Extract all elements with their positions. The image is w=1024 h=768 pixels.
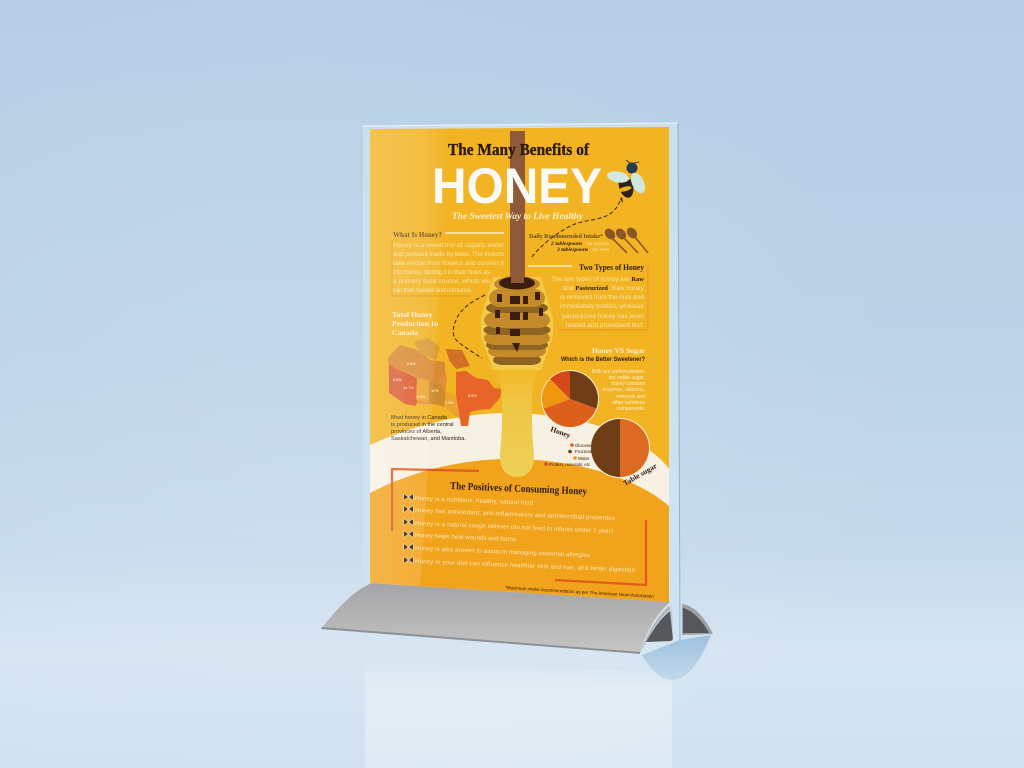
two types body: and Pasteurized. Raw honey <box>563 285 645 292</box>
daily intake: for women <box>587 241 610 247</box>
arctic islands <box>414 338 440 360</box>
heading: total honey production: Production In <box>392 319 439 328</box>
bee bullets <box>404 494 413 563</box>
heading: two types: Two Types of Honey <box>579 263 644 272</box>
list: benefits: Honey is also proven to assist in managing seasonal allergies <box>415 546 590 559</box>
icon: honey dipper <box>481 265 553 477</box>
panel: two types of honey <box>528 263 648 330</box>
honey vs sugar heading: Honey VS Sugar <box>592 346 646 355</box>
pie chart: honey <box>541 370 599 428</box>
province labels: 41.7% <box>403 386 414 390</box>
honey vs sugar text: minerals and <box>616 394 645 400</box>
province labels: 0.6% <box>417 395 426 399</box>
list: benefits: Honey is a natural cough reliever (do not feed to infants under 1 year) <box>415 521 613 535</box>
province labels: 1.3% <box>445 401 454 405</box>
ontario <box>444 392 460 418</box>
two types body: heated and processed first. <box>566 322 644 329</box>
canada map <box>388 338 502 426</box>
pie chart: table sugar <box>590 418 650 478</box>
text: most honey in canada: is produced in the central <box>391 422 454 428</box>
pie legend: Water <box>578 456 590 461</box>
dipper head <box>481 276 553 370</box>
province labels: 8.6% <box>393 378 402 382</box>
text: most honey in canada: provinces of Alberta, <box>391 429 442 435</box>
subtitle: The Sweetest Way to Live Healthy <box>452 212 584 222</box>
dipper handle <box>498 375 536 477</box>
heading: total honey production <box>392 312 438 335</box>
province labels: 8.9% <box>468 394 477 398</box>
title: The Many Benefits of <box>448 140 589 159</box>
two types body: is removed from the hive and <box>560 294 644 301</box>
what is honey body: into honey, storing it in their hives as <box>393 269 491 276</box>
heading: positives of consuming honey: The Positives of Consuming Honey <box>450 481 588 498</box>
yukon and northwest territories <box>388 345 445 382</box>
text: most honey in canada: Most honey in Canada <box>391 415 448 421</box>
manitoba <box>429 381 446 407</box>
acrylic sign holder <box>363 123 680 640</box>
two types body: immediately bottled, whereas <box>560 303 645 310</box>
daily intake: 3 tablespoons <box>556 247 588 253</box>
honey vs sugar heading <box>561 348 645 361</box>
pie label: honey: Honey <box>549 424 572 440</box>
pie legend <box>544 443 593 467</box>
text: most honey in canada <box>391 415 466 442</box>
what is honey body <box>393 242 505 294</box>
heading: total honey production: Total Honey <box>392 310 433 319</box>
what is honey body: a primary food source, which we <box>393 278 490 285</box>
province labels <box>393 362 477 405</box>
honey vs sugar text: components. <box>616 406 645 412</box>
honey word: HONEY <box>432 158 602 214</box>
province labels: 12% <box>431 389 439 393</box>
daily intake <box>529 233 610 253</box>
dashed flight path lower <box>453 295 485 358</box>
honey vs sugar text: enzymes, vitamins, <box>602 387 645 393</box>
orange lower panel <box>370 459 670 603</box>
province labels: 0.8% <box>407 362 416 366</box>
honey vs sugar text: Both are carbohydrates, <box>592 369 645 375</box>
list: benefits: Honey in your diet can influence healthier skin and hair, and better digestion <box>415 559 635 574</box>
list: benefits: Honey is a nutritious, healthy, natural food <box>415 496 533 507</box>
daily intake: Daily Recommended Intake* <box>529 233 603 240</box>
daily intake: 2 tablespoons <box>550 241 582 247</box>
floor reflection <box>365 635 711 768</box>
two types body <box>551 276 645 329</box>
quebec and east <box>456 371 502 426</box>
panel: what is honey <box>392 230 505 296</box>
what is honey body: can then harvest and consume. <box>393 287 472 294</box>
saskatchewan <box>416 378 429 402</box>
text: most honey in canada: Saskatchewan, and Manitoba. <box>391 436 466 442</box>
british columbia <box>389 365 405 404</box>
pie legend: Protein, minerals, etc <box>549 462 591 467</box>
footnote: *Maximum intake recommendation as per The American Heart Association <box>505 585 654 599</box>
heading: total honey production: Canada <box>392 328 418 337</box>
pie legend: Fructose <box>575 449 593 454</box>
orange bracket top left <box>392 469 479 531</box>
glass glare <box>370 128 450 590</box>
list: benefits: Honey has antioxidant, anti-inflammatory and antimicrobial properties <box>415 508 615 522</box>
what is honey body: Honey is a sweet mix of sugars, water <box>393 242 505 249</box>
two types body: pasteurized honey has been <box>562 313 644 320</box>
honey vs sugar heading: Which is the Better Sweetener? <box>561 357 645 363</box>
dipper slots <box>495 292 543 352</box>
icon: three wooden spoons <box>603 226 648 253</box>
pie label: table sugar: Table sugar <box>622 461 659 488</box>
orange bracket bottom right <box>555 520 646 585</box>
poster background <box>370 127 669 469</box>
list: benefits: Honey helps heal wounds and burns <box>415 533 516 543</box>
honey vs sugar text: honey contains <box>611 381 645 387</box>
heading: what is honey: What Is Honey? <box>393 230 442 239</box>
icon: bee <box>606 160 648 203</box>
what is honey body: and proteins made by bees. The insects <box>393 251 505 258</box>
honey vs sugar text: but unlike sugar, <box>609 375 645 381</box>
dashed flight path upper <box>531 201 620 258</box>
pie legend: Glucose <box>575 443 592 448</box>
honey vs sugar text: other nutritious <box>612 400 645 406</box>
alberta <box>403 372 418 406</box>
cream wave <box>370 413 669 506</box>
display stand base <box>321 583 713 654</box>
daily intake: for men <box>593 247 610 253</box>
map silhouette <box>388 345 460 419</box>
two types body: The two types of honey are Raw <box>551 276 644 283</box>
honey vs sugar text <box>592 369 645 412</box>
poster <box>370 127 670 603</box>
list: benefits <box>415 496 635 574</box>
dipper stem <box>510 131 525 283</box>
what is honey body: take nectar from flowers and convert it <box>393 260 504 267</box>
